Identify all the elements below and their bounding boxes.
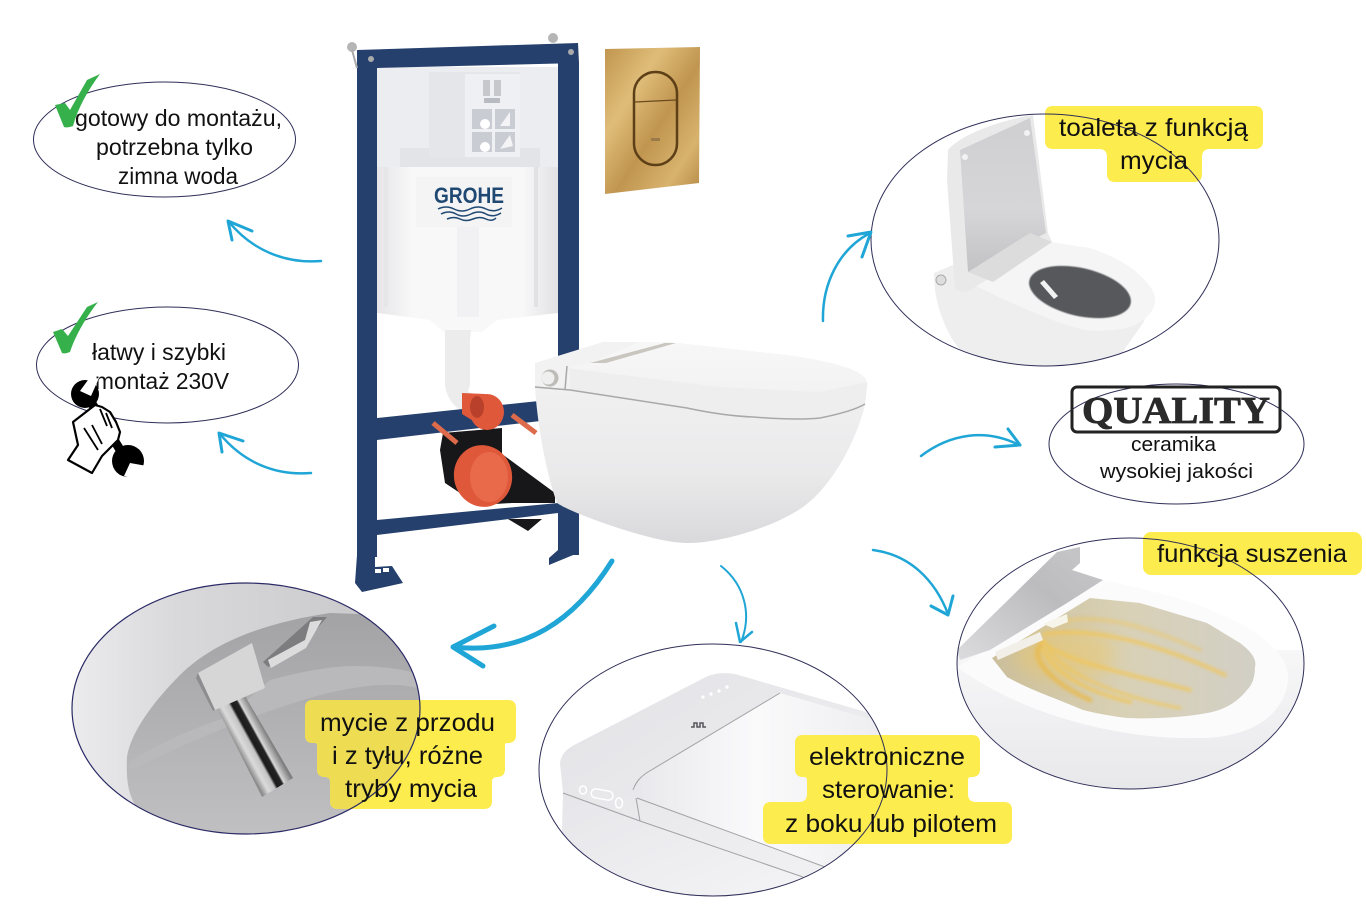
- label text: sterowanie:: [822, 776, 955, 804]
- open lid: [947, 115, 1052, 292]
- seams: [563, 693, 825, 877]
- bowl base: [958, 651, 1304, 788]
- easy installation text: łatwy i szybki: [92, 339, 226, 365]
- label text: z boku lub pilotem: [785, 810, 997, 838]
- label text: [1059, 114, 1248, 175]
- label background: [1143, 532, 1362, 575]
- arrow: to easy installation: [219, 433, 311, 473]
- wall bolts: [347, 33, 558, 68]
- arrow: to quality ceramic: [921, 429, 1020, 456]
- ready to install text: zimna woda: [118, 163, 238, 189]
- label background: [305, 700, 516, 809]
- bowl base: [934, 242, 1155, 370]
- label text: [320, 709, 495, 803]
- seat slot: [263, 617, 327, 667]
- arrow: to ready to install: [228, 221, 321, 261]
- panel: front and rear washing: [70, 580, 516, 850]
- arrow: to washing nozzle: [453, 561, 612, 666]
- label text: [785, 743, 997, 838]
- arrow: to drying function: [873, 550, 953, 615]
- control strip: [590, 343, 676, 363]
- quality text: ceramika: [1131, 434, 1217, 456]
- inner ledge: [248, 666, 417, 715]
- indicator lights: [701, 685, 729, 699]
- check mark: [53, 302, 98, 353]
- ellipse outline: [957, 538, 1304, 789]
- toilet illustration: [934, 115, 1155, 370]
- panel: drying function: [950, 532, 1362, 800]
- bowl interior: [126, 613, 419, 834]
- hinge plate: [968, 233, 1052, 282]
- arrow: to electronic control: [721, 566, 752, 642]
- bowl interior: [992, 598, 1255, 718]
- GROHE logo: GROHE: [434, 183, 504, 208]
- ellipse outline: [36, 307, 298, 423]
- orange fittings: [433, 393, 536, 513]
- panel: easy installation: [36, 302, 298, 482]
- ellipse outline: [72, 583, 420, 834]
- toilet lid: [567, 342, 867, 419]
- lower body: [560, 793, 803, 900]
- main wall-hung toilet: [535, 342, 867, 543]
- ready to install text: [75, 105, 282, 189]
- rim: [72, 584, 359, 804]
- quality text: [1099, 434, 1253, 483]
- dryer nozzles: [995, 632, 1043, 660]
- wash wand: [1040, 280, 1058, 299]
- ready to install text: gotowy do montażu,: [75, 105, 282, 131]
- label text: mycia: [1120, 147, 1188, 175]
- ellipse outline: [1049, 384, 1304, 504]
- hinge: [936, 275, 946, 285]
- ellipse outline: [871, 114, 1219, 366]
- seat: [1054, 243, 1155, 317]
- warm air glow: [1015, 629, 1115, 681]
- lid front band: [567, 368, 867, 419]
- side button: [542, 370, 558, 386]
- panel: installation frame GROHE: [347, 33, 579, 592]
- toilet bowl: [535, 387, 865, 543]
- seat seam: [535, 366, 865, 419]
- easy installation text: montaż 230V: [95, 368, 230, 394]
- label background: [1045, 106, 1263, 182]
- raised lid: [957, 547, 1103, 660]
- ellipse outline: [539, 644, 887, 896]
- quality text: wysokiej jakości: [1099, 461, 1253, 483]
- ellipse outline: [34, 82, 296, 197]
- GROHE logo: [416, 177, 512, 227]
- cistern tank: [377, 67, 558, 332]
- panel: ready to install: [34, 74, 296, 197]
- hinge block: [535, 342, 640, 391]
- label text: toaleta z funkcją: [1059, 114, 1248, 142]
- panel: electronic control: [539, 644, 1012, 900]
- lid panel: [690, 693, 834, 852]
- control box: [429, 72, 520, 157]
- nozzle illustration: [72, 584, 419, 834]
- label text: mycie z przodu: [320, 709, 495, 737]
- check mark: [55, 74, 100, 127]
- yellow label shape: [305, 700, 516, 809]
- label text: funkcja suszenia: [1157, 540, 1347, 568]
- panel: quality ceramic: [1049, 384, 1304, 504]
- easy installation text: [92, 339, 230, 394]
- top housing: [560, 673, 880, 877]
- quality stamp: QUALITY: [1082, 390, 1270, 432]
- drain pipe: [445, 330, 480, 415]
- control illustration: [560, 673, 880, 900]
- icon: hand with wrench: [68, 378, 147, 482]
- arrows: [219, 221, 1020, 666]
- label background: [763, 735, 1012, 844]
- panel: washing toilet photo: [871, 106, 1263, 370]
- nozzle head: [198, 643, 265, 710]
- logo mark: [691, 723, 706, 727]
- label text: tryby mycia: [345, 775, 477, 803]
- seat rim: [993, 688, 1286, 738]
- nozzle cylinder: [217, 696, 293, 797]
- steel frame: [355, 43, 579, 592]
- bracket tail: [508, 519, 542, 531]
- arrow: to washing toilet photo: [823, 232, 871, 321]
- drying illustration: [950, 547, 1310, 800]
- yellow overlap tint: [305, 700, 420, 809]
- side buttons: [580, 786, 622, 808]
- gold flush plate: [605, 47, 700, 194]
- seat opening: [1028, 265, 1132, 319]
- warm air swirl: [1037, 619, 1225, 708]
- label text: elektroniczne: [809, 743, 965, 771]
- ready to install text: potrzebna tylko: [96, 134, 253, 160]
- black drain bracket: [440, 428, 555, 505]
- label text: i z tyłu, różne: [332, 742, 483, 770]
